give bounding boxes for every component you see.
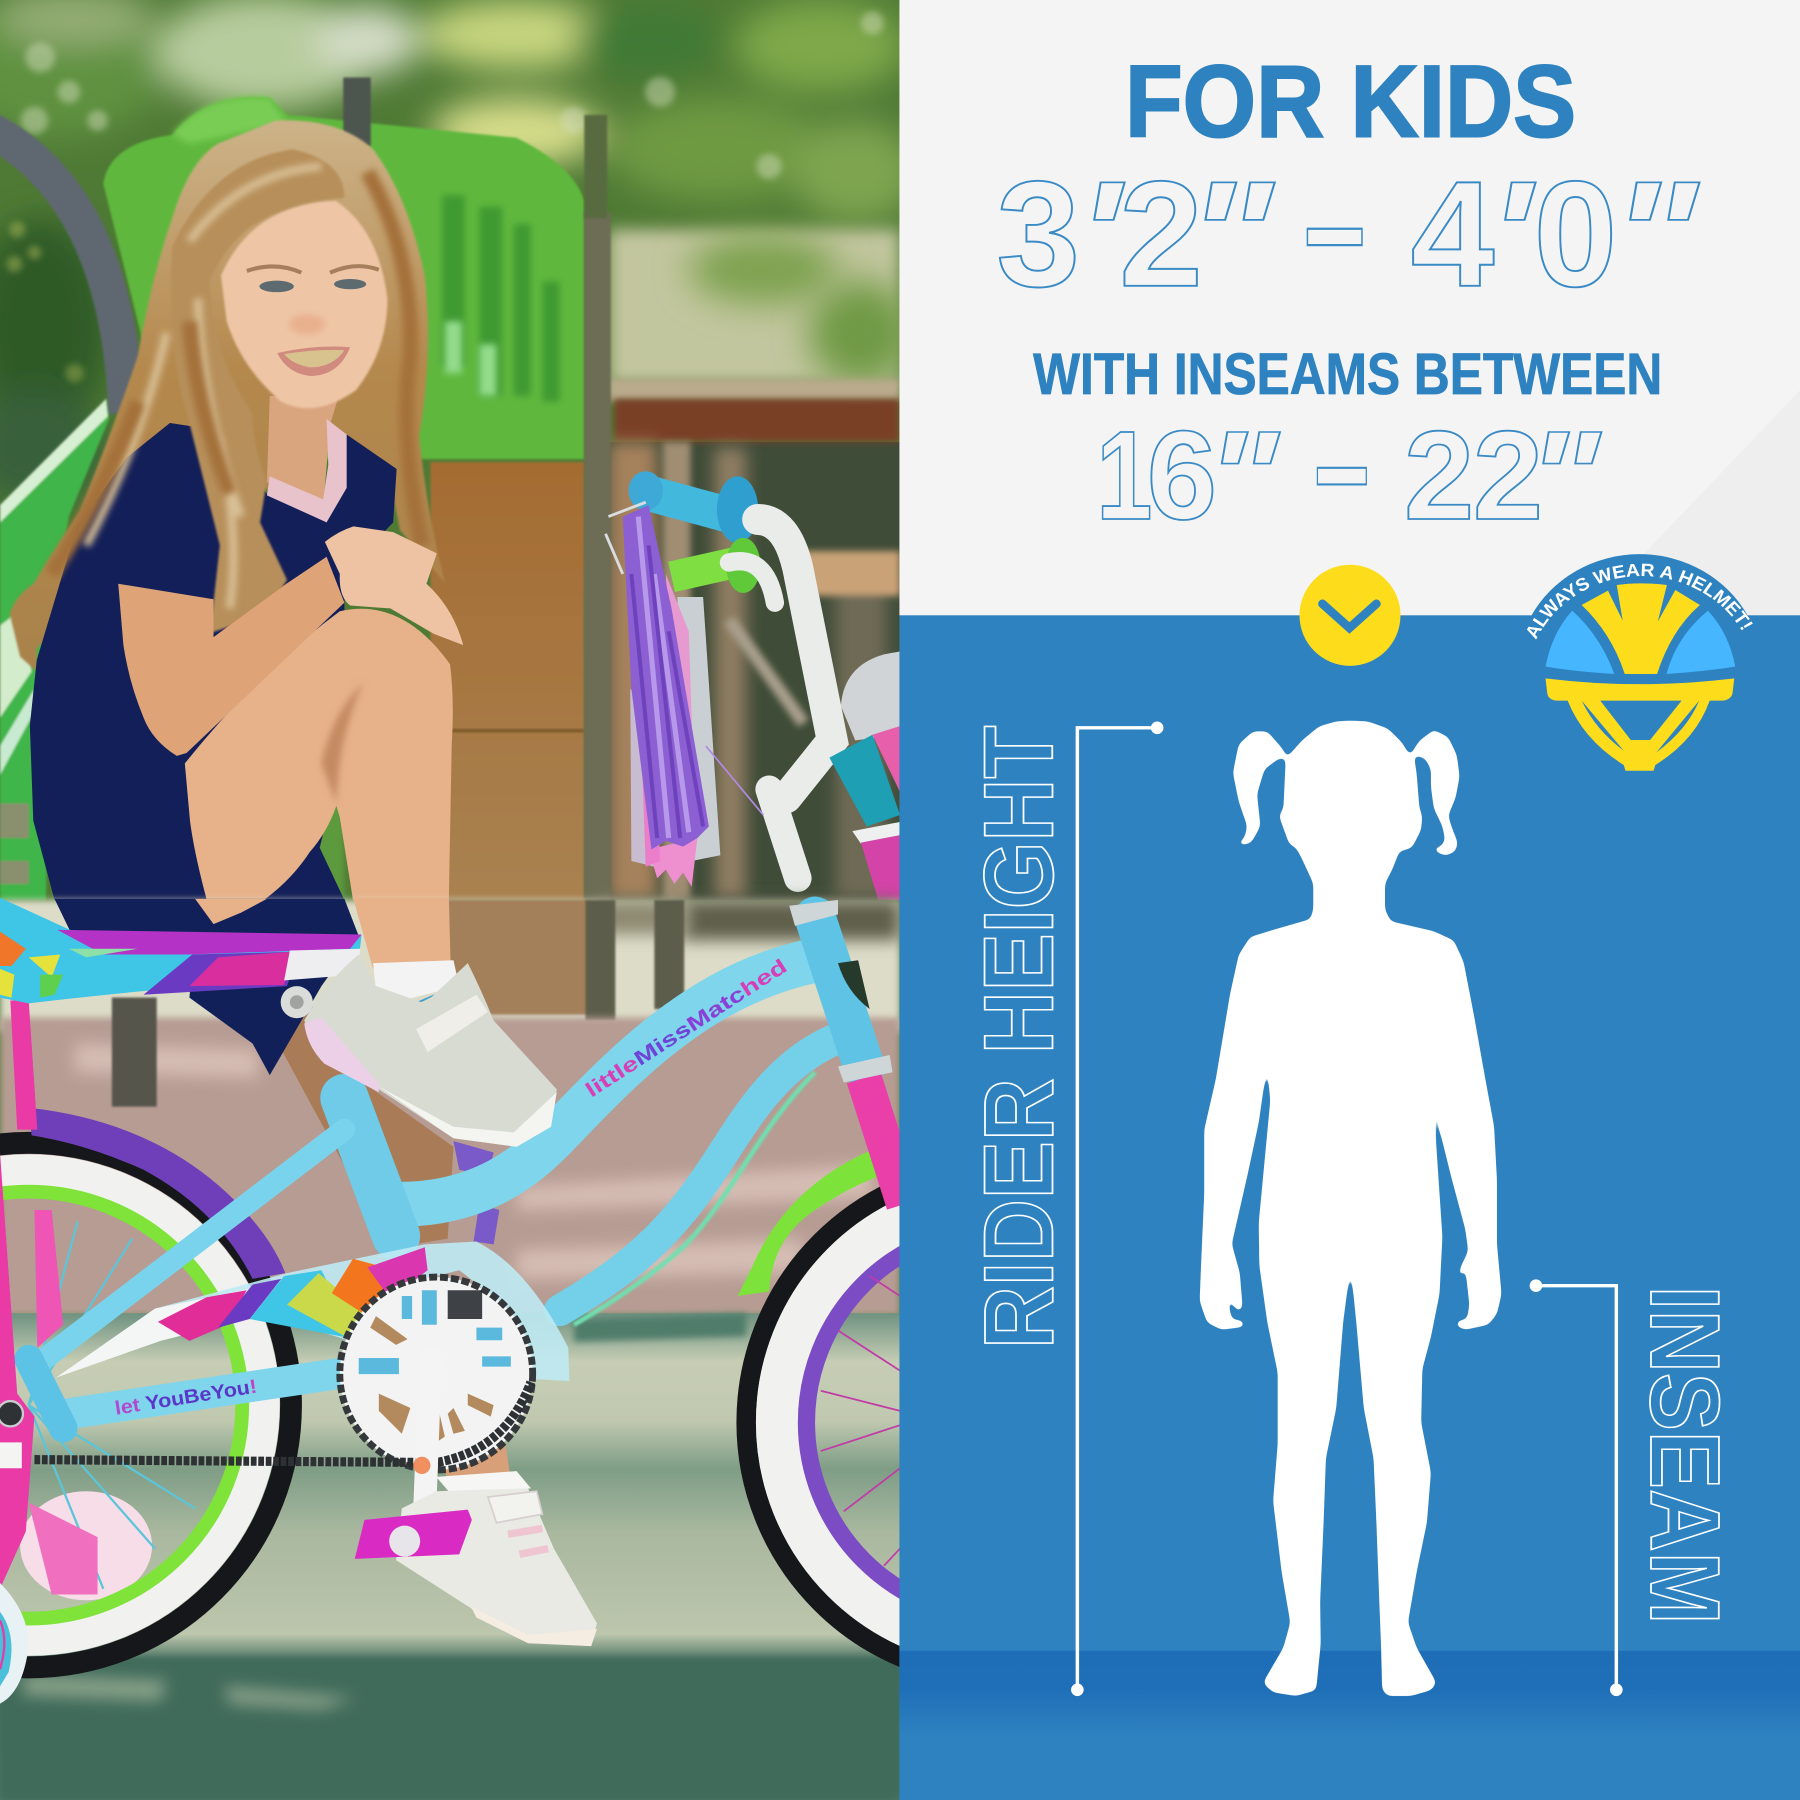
bike: magenta pedal — [355, 1510, 472, 1559]
height range outlined: ' — [1488, 151, 1537, 318]
bike: rear wheel — [0, 1143, 291, 1667]
bike: head tube badge — [838, 960, 870, 1009]
photo: upper background and girl — [0, 0, 918, 924]
rider height measure line — [1071, 721, 1163, 1696]
height range outlined: " — [1186, 150, 1276, 318]
bike: collar — [789, 900, 893, 1083]
bike: white handlebar stem — [729, 519, 832, 878]
bike: seat post and rear pink frame — [0, 1000, 98, 1595]
bike: seat — [0, 898, 362, 1003]
ground and background — [0, 900, 900, 1800]
diagonal light facets — [1584, 390, 1800, 616]
background: green play structure — [103, 97, 584, 459]
background: grey arch pipe — [0, 129, 126, 413]
background: fence and deck — [608, 230, 913, 900]
inseam range outlined: 6 — [1147, 405, 1217, 546]
inseam range outlined: 1 — [1096, 405, 1152, 546]
bike: chain ring — [340, 1277, 533, 1470]
girl: hands — [325, 526, 463, 645]
girl: hair over face and front lock — [171, 149, 344, 633]
inseam measure line — [1530, 1279, 1623, 1696]
height range outlined: " — [1611, 150, 1700, 318]
helmet arc lettering: ALWAYS WEAR A HELMET! — [1527, 564, 1753, 640]
subheading: inseams: WITH INSEAMS BETWEEN — [1033, 342, 1662, 407]
inseam range outlined: " — [1205, 404, 1281, 546]
height range outlined: ' — [1077, 151, 1126, 318]
bike: plush toy and basket — [829, 651, 900, 900]
bike: crank bolt — [413, 1457, 430, 1474]
girl: neck — [267, 396, 339, 508]
inseam label: INSEAM — [1630, 1286, 1740, 1624]
girl: eyes and brows — [247, 266, 379, 292]
foliage bokeh background — [0, 0, 918, 505]
rider height label: RIDER HEIGHT — [964, 726, 1074, 1349]
background: green slide — [0, 399, 109, 900]
bike: frame name text: littleMissMatched — [581, 955, 791, 1102]
girl: collar — [267, 419, 347, 522]
helmet side vents — [1546, 611, 1735, 674]
girl: upper shoe — [304, 955, 557, 1147]
floor band — [899, 1651, 1800, 1737]
girl: leg and dress continuation — [55, 898, 511, 1480]
girl: knee bend shading — [321, 683, 363, 804]
bike: crank arm — [425, 1359, 430, 1508]
background: brown panel and post — [310, 77, 611, 900]
height range outlined: 4 — [1411, 150, 1494, 318]
girl: arm — [118, 557, 344, 756]
height range outlined: – — [1304, 132, 1365, 317]
inseam range outlined: – — [1314, 370, 1369, 558]
girl: lower shoe — [396, 1471, 597, 1646]
girl: dress — [30, 423, 397, 900]
girl: smile — [277, 314, 350, 376]
bike: seat bolt — [281, 986, 313, 1018]
bike: rear fender — [29, 1108, 285, 1279]
bike: chain stay text: let YouBeYou! — [113, 1376, 258, 1420]
height range outlined: 2 — [1119, 150, 1203, 318]
height range outlined — [996, 132, 1700, 318]
girl: raised thigh and lower leg — [185, 609, 453, 924]
child silhouette — [1200, 721, 1502, 1696]
panel: blue sizing diagram — [899, 615, 1800, 1800]
panel: sizing info header — [899, 0, 1800, 616]
bike: rear pedal bits — [453, 1141, 499, 1244]
inseam range outlined: " — [1527, 404, 1602, 546]
inseam range outlined: 2 — [1404, 405, 1474, 546]
girl: hair behind — [10, 120, 445, 672]
girl: hair shade right — [52, 172, 422, 574]
icon: yellow down chevron badge — [1299, 565, 1401, 666]
bike: frame tubes — [29, 917, 864, 1428]
girl: hair highlights — [86, 166, 321, 608]
inseam range outlined: 2 — [1473, 405, 1543, 546]
girl: face — [221, 201, 387, 408]
height range outlined: 0 — [1534, 150, 1617, 318]
bike: grips — [629, 471, 761, 593]
helmet dome backing — [1531, 554, 1748, 617]
height range outlined: 3 — [996, 150, 1080, 318]
bike: pink training wheel disc — [20, 1491, 152, 1600]
bike: down tube green shading — [574, 1072, 815, 1325]
bike: chain — [34, 1382, 531, 1462]
heading: for kids: FOR KIDS — [1125, 45, 1576, 159]
bike: pink fork — [864, 1078, 904, 1204]
bike: streamer tassels — [606, 502, 763, 887]
bike: chain guard — [56, 1242, 569, 1381]
bike: training wheel — [0, 1401, 29, 1704]
helmet brim and straps — [1546, 678, 1734, 771]
bike: front fender — [738, 1150, 878, 1296]
panel: photo of girl on bike — [0, 0, 1257, 1800]
icon: helmet badge — [1527, 554, 1753, 771]
inseam range outlined — [1096, 370, 1602, 558]
helmet centre — [1582, 583, 1700, 674]
bike: front wheel — [746, 1167, 1257, 1678]
photo: lower scene with bike — [0, 898, 1257, 1800]
